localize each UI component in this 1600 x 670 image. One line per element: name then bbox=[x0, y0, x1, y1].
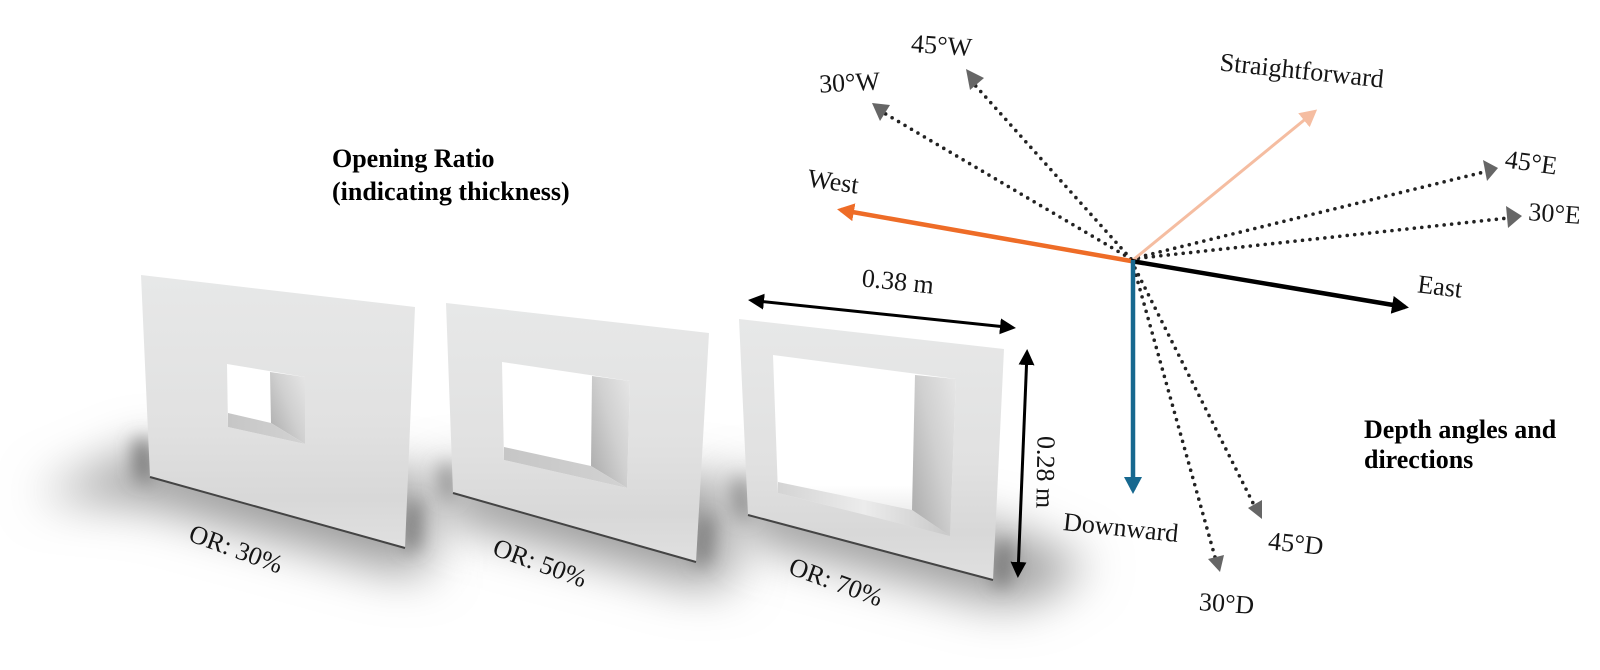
label: width: 0.38 m bbox=[860, 263, 935, 300]
arrow: west bbox=[841, 210, 1131, 261]
label: 45 E: 45°E bbox=[1503, 145, 1559, 181]
arrow: downward bbox=[1131, 260, 1135, 490]
label: 45 W: 45°W bbox=[910, 29, 973, 62]
arrow: width dimension bbox=[752, 300, 1012, 328]
heading: depth angles: directions bbox=[1364, 445, 1473, 474]
label: west: West bbox=[806, 164, 861, 200]
arrow: 45 W bbox=[966, 69, 1131, 259]
label: downward: Downward bbox=[1062, 507, 1180, 548]
title: opening ratio: Opening Ratio bbox=[332, 144, 495, 173]
heading: depth angles: Depth angles and bbox=[1364, 415, 1556, 444]
arrow: straightforward bbox=[1133, 112, 1314, 260]
arrow: 30 W bbox=[872, 103, 1131, 259]
opening: OR 70% bbox=[773, 355, 956, 536]
arrow: 30 D bbox=[1134, 268, 1224, 572]
arrow: 45 D bbox=[1135, 268, 1262, 519]
label: height: 0.28 m bbox=[1030, 436, 1061, 509]
label: 30 E: 30°E bbox=[1528, 197, 1582, 230]
label: OR 50%: OR: 50% bbox=[489, 533, 591, 593]
label: OR 30%: OR: 30% bbox=[185, 519, 287, 579]
panel: OR 50% bbox=[446, 303, 709, 562]
label: east: East bbox=[1416, 269, 1465, 304]
label: 45 D: 45°D bbox=[1267, 526, 1325, 561]
label: OR 70%: OR: 70% bbox=[785, 552, 887, 612]
arrow: 30 E bbox=[1131, 206, 1522, 259]
label: 30 D: 30°D bbox=[1198, 587, 1255, 620]
label: straightforward: Straightforward bbox=[1219, 48, 1385, 94]
arrow: east bbox=[1131, 261, 1405, 307]
panel: OR 70% bbox=[739, 319, 1004, 580]
arrow: 45 E bbox=[1131, 160, 1498, 259]
opening: OR 30% bbox=[227, 364, 305, 444]
label: 30 W: 30°W bbox=[818, 66, 881, 99]
opening: OR 50% bbox=[502, 362, 630, 488]
ground shadows bbox=[35, 440, 1090, 604]
title: opening ratio: (indicating thickness) bbox=[332, 177, 570, 206]
arrow: height dimension bbox=[1018, 353, 1027, 574]
panel: OR 30% bbox=[141, 275, 415, 548]
